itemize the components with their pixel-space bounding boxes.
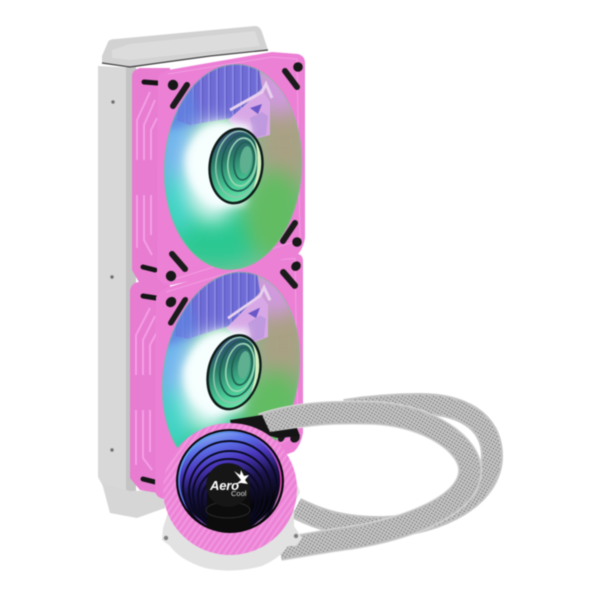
logo: Aero <box>209 478 239 493</box>
black bezel <box>176 429 284 533</box>
logo: Cool <box>231 489 247 498</box>
braided tube: back <box>296 404 492 527</box>
side pegs <box>143 82 157 270</box>
radiator top cap <box>102 26 268 68</box>
radiator screws <box>110 100 115 452</box>
logo <box>209 470 249 498</box>
radiator <box>98 26 268 518</box>
pump head <box>163 423 297 555</box>
pump cap <box>206 463 250 532</box>
tube collar <box>230 415 300 438</box>
lower fan <box>151 249 313 501</box>
side pegs lower <box>143 296 156 482</box>
pink carbon ring <box>163 423 297 555</box>
upper fan <box>153 52 315 285</box>
RGB rim <box>178 431 282 531</box>
product illustration: pink and white AIO liquid cooler <box>98 26 504 571</box>
mounting ear holes <box>164 536 168 540</box>
fan side shroud upper <box>132 68 170 290</box>
braided tube: front <box>262 413 470 549</box>
logo mark <box>234 470 249 484</box>
fan side shroud lower <box>130 282 170 495</box>
radiator bottom cap <box>102 483 165 518</box>
pump base <box>162 480 302 571</box>
radiator body <box>98 66 136 492</box>
infinity mirror rings <box>183 441 277 533</box>
